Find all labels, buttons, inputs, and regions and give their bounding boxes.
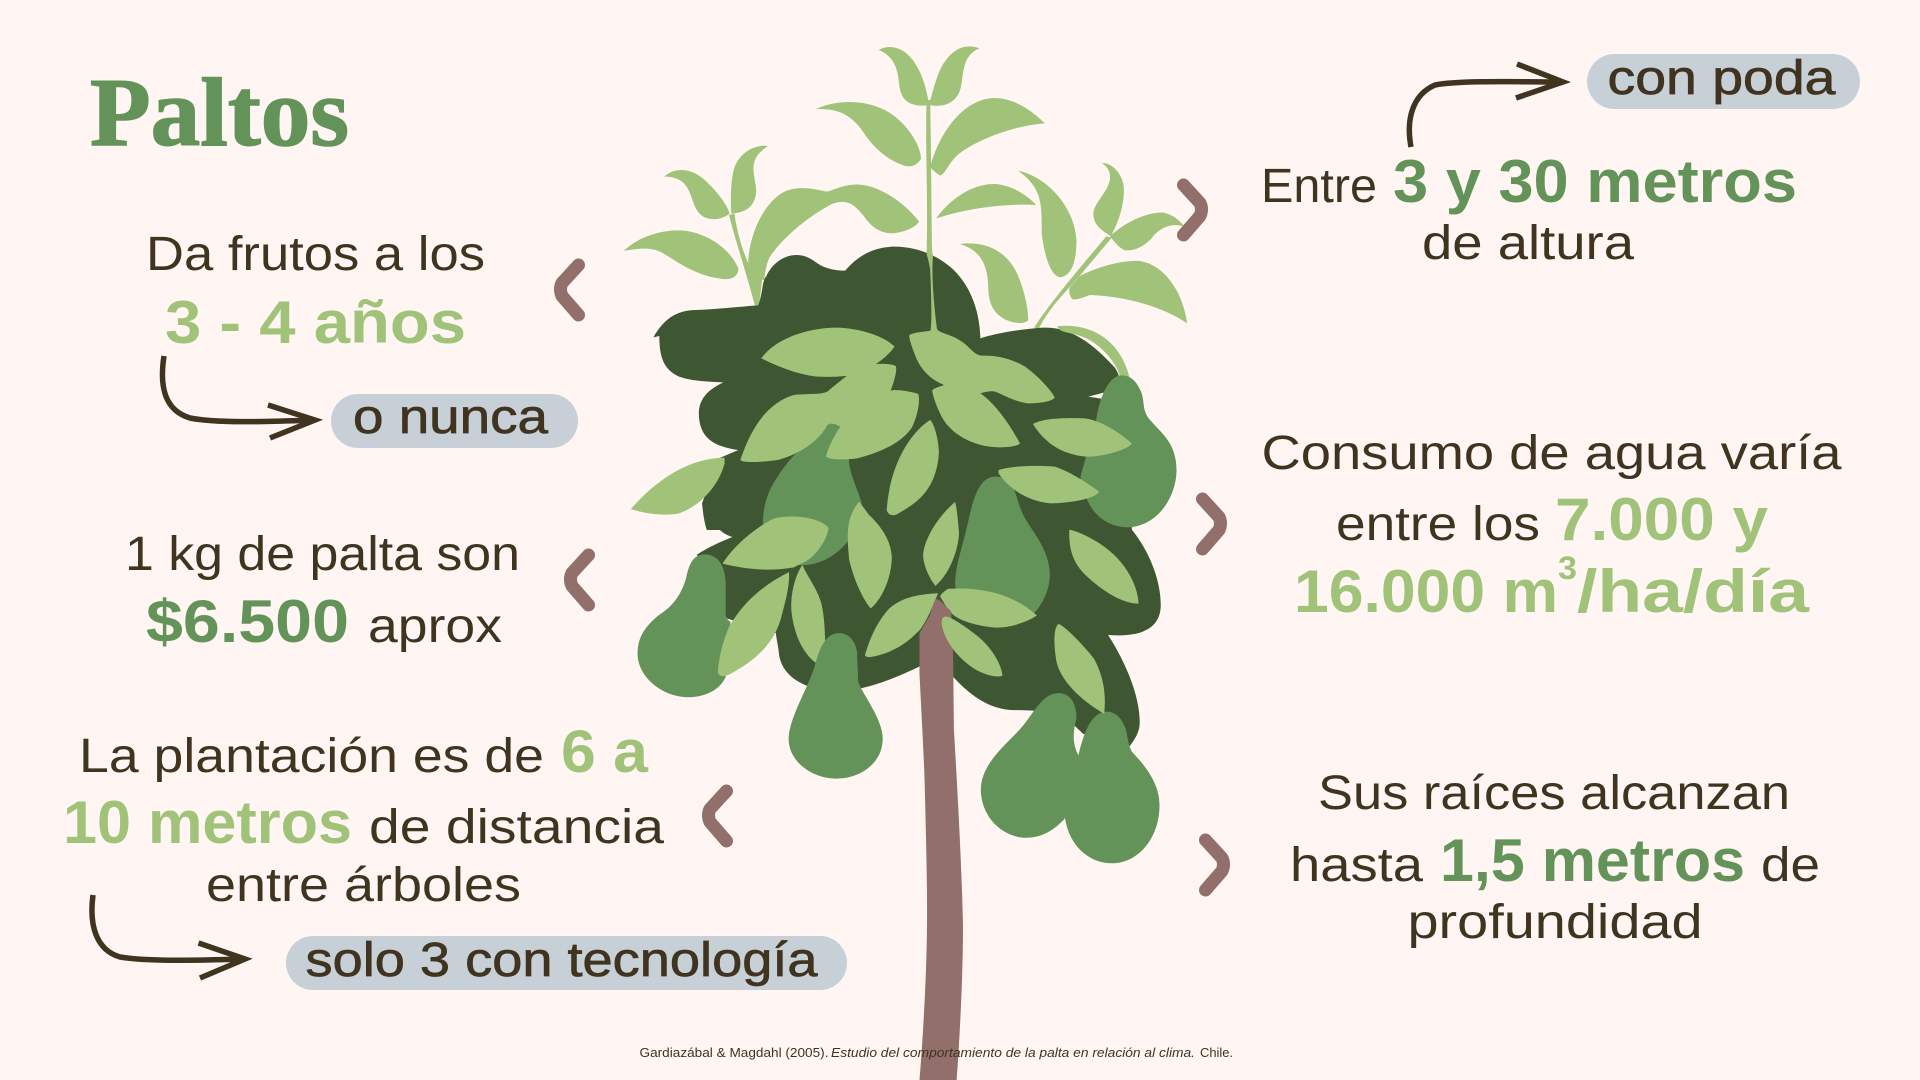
block: water use: [1262, 427, 1842, 625]
chevron: fruit age: [560, 265, 578, 315]
highlight: price: $6.500: [146, 588, 349, 655]
illustration: avocado tree: [624, 46, 1187, 1080]
source footnote: Gardiazábal & Magdahl (2005).: [640, 1045, 828, 1060]
dark green canopy: [653, 247, 1161, 746]
chevron: water use: [1202, 499, 1220, 549]
text: profundidad: profundidad: [1408, 896, 1702, 949]
chevron: roots: [1206, 840, 1224, 890]
text: hasta: hasta: [1290, 839, 1423, 892]
text: 1 kg de palta son: 1 kg de palta son: [125, 528, 520, 581]
block: planting distance: [63, 718, 847, 990]
pill: con poda: [1587, 52, 1860, 109]
highlight: 3 y 30 metros: 3 y 30 metros: [1393, 148, 1797, 215]
chevron: height: [1184, 185, 1202, 235]
text: de: de: [1761, 839, 1820, 892]
block: price: [125, 528, 520, 655]
block: roots: [1290, 767, 1820, 949]
highlight: 16.000 m: 16.000 m: [1294, 558, 1558, 625]
pill: con poda: con poda: [1608, 52, 1836, 105]
pill: o nunca: [331, 391, 578, 448]
top sprigs of leaves: [624, 46, 1187, 328]
highlight: 3 - 4 años: 3 - 4 años: [165, 289, 466, 356]
highlight: 6 a: 6 a: [561, 718, 649, 785]
pill: solo 3 con tecnologia: solo 3 con tecnología: [306, 934, 818, 987]
arrow to o nunca: [162, 356, 315, 438]
avocados and leaves upper canopy: [631, 328, 1177, 625]
block: height: [1261, 52, 1860, 270]
block: fruit age: [146, 228, 578, 448]
highlight: /ha/dia: /ha/día: [1577, 558, 1810, 625]
text: sus raices alcanzan: Sus raíces alcanzan: [1318, 767, 1790, 820]
trunk, lower avocados and leaves: [638, 502, 1160, 1080]
text: entre los: entre los: [1336, 498, 1540, 551]
arrow to con poda: [1409, 64, 1563, 147]
chevron: planting distance: [708, 791, 726, 841]
source footnote: Chile.: [1200, 1045, 1233, 1060]
text: aprox: aprox: [368, 600, 502, 653]
text: la plantacion: La plantación es de: [79, 730, 544, 783]
title: Paltos: [90, 59, 349, 167]
source footnote: Estudio del comportamiento de la palta en relación al clima.: [831, 1045, 1195, 1060]
highlight: 10 metros: 10 metros: [63, 789, 352, 856]
text: entre: Entre: [1261, 160, 1377, 213]
central stem: [926, 100, 942, 335]
text: consumo de agua: Consumo de agua varía: [1262, 427, 1842, 480]
text: de altura: de altura: [1422, 217, 1634, 270]
chevron: price: [570, 555, 588, 605]
arrow to solo 3: [92, 895, 245, 978]
source footnote: [640, 1045, 1233, 1060]
text: entre arboles: entre árboles: [206, 859, 521, 912]
text: da frutos: Da frutos a los: [146, 228, 485, 281]
highlight: superscript 3: 3: [1558, 550, 1577, 586]
arc leaf behind right avocado: [1058, 326, 1130, 378]
highlight: 7.000 y: 7.000 y: [1555, 486, 1769, 553]
pill: o nunca: o nunca: [353, 391, 548, 444]
highlight: 1,5 metros: 1,5 metros: [1440, 827, 1745, 894]
text: de distancia: de distancia: [369, 801, 664, 854]
